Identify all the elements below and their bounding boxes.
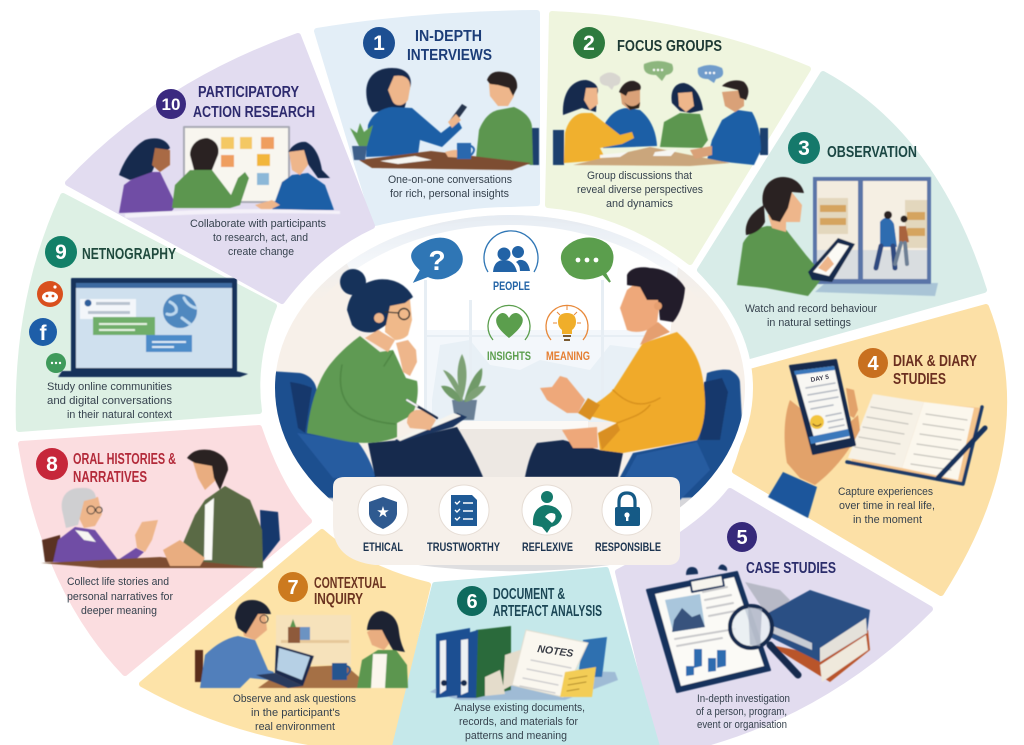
heading: in-depth interviews: IN-DEPTH (415, 28, 482, 45)
badge 4 (858, 348, 888, 378)
panel: 3 observation (700, 74, 984, 357)
heading: diak and diary studies: STUDIES (893, 371, 946, 388)
description: patterns and meaning (465, 730, 567, 742)
badge 2: 2 (583, 32, 595, 55)
label: responsible: RESPONSIBLE (595, 540, 661, 554)
icon: facebook: f (40, 322, 48, 345)
illustration: elder telling a story (41, 450, 280, 568)
panel: 4 diary studies (735, 307, 1004, 593)
description: create change (228, 246, 294, 258)
illustration: team at sticky-note board (119, 127, 340, 218)
badge 8 (36, 448, 68, 480)
description: real environment (255, 721, 335, 733)
description: One-on-one conversations (388, 174, 513, 186)
badge 9: 9 (55, 241, 67, 264)
heading: oral histories and narratives (73, 451, 176, 486)
heading: in-depth interviews (407, 28, 492, 64)
icon: facebook (29, 318, 57, 346)
icon: reflexive figure (522, 485, 572, 535)
label: meaning: MEANING (546, 349, 590, 363)
illustration: researcher with laptop and participant (195, 600, 408, 688)
description: deeper meaning (81, 605, 157, 617)
description (838, 486, 935, 526)
badge 10 (156, 89, 186, 119)
icon: trustworthy checklist (439, 485, 489, 535)
description (47, 381, 173, 421)
badge 7 (278, 572, 308, 602)
icon: reddit (37, 281, 63, 307)
description: for rich, personal insights (390, 188, 510, 200)
description (745, 303, 877, 329)
heading: diak and diary studies: DIAK & DIARY (893, 353, 977, 370)
description (234, 694, 356, 730)
label: insights: INSIGHTS (487, 349, 531, 363)
description: and dynamics (606, 198, 674, 210)
heading: participatory action research: ACTION RESEARCH (193, 104, 315, 121)
badge 1: 1 (373, 32, 385, 55)
panel: 10 participatory action research (68, 36, 372, 301)
heading: case studies: CASE STUDIES (746, 560, 836, 577)
heading: oral histories and narratives: ORAL HISTORIES & (73, 451, 176, 468)
badge 2 (573, 27, 605, 59)
panel: 1 in-depth interviews (317, 13, 539, 223)
illustration: laptop with conversations (58, 279, 248, 377)
description: in the participant's (251, 707, 341, 719)
icon: heart (488, 305, 530, 340)
description (388, 174, 513, 200)
central interview scene (275, 207, 753, 508)
description: Watch and record behaviour (745, 303, 877, 315)
description: In-depth investigation (697, 693, 790, 705)
heading: netnography: NETNOGRAPHY (82, 246, 176, 263)
icon: question bubble: ? (428, 245, 446, 276)
label: trustworthy: TRUSTWORTHY (427, 540, 500, 554)
badge 5: 5 (736, 527, 748, 549)
icon: people (484, 231, 538, 272)
description: reveal diverse perspectives (577, 184, 704, 196)
description: records, and materials for (459, 716, 578, 728)
researcher in chair (270, 269, 483, 500)
icon: responsible padlock (602, 485, 652, 535)
heading: participatory action research: PARTICIPATORY (198, 84, 299, 101)
panel: 5 case studies (618, 491, 930, 745)
icon: light bulb (546, 305, 588, 341)
panel: 2 focus groups (548, 14, 808, 262)
panel: 6 document and artefact analysis (392, 570, 658, 745)
description: of a person, program, (696, 706, 787, 718)
description: Analyse existing documents, (454, 702, 585, 714)
notes page label: NOTES (537, 643, 574, 660)
badge 3: 3 (798, 137, 810, 160)
illustration: interview at a table (350, 68, 539, 170)
badge 8: 8 (46, 453, 58, 476)
description: Capture experiences (838, 486, 934, 498)
description: in natural settings (767, 317, 852, 329)
badge 10: 10 (162, 95, 180, 114)
description: in the moment (853, 514, 922, 526)
heading: focus groups: FOCUS GROUPS (617, 38, 722, 55)
icon: ethical shield (358, 485, 408, 535)
heading: contextual inquiry: CONTEXTUAL (314, 575, 386, 592)
description: personal narratives for (67, 591, 173, 603)
badge 1 (363, 27, 395, 59)
badge 7: 7 (287, 577, 299, 599)
description (696, 693, 790, 731)
description: Collaborate with participants (190, 218, 327, 230)
plant (441, 354, 486, 420)
panel: 7 contextual inquiry (142, 532, 428, 745)
description: Group discussions that (587, 170, 692, 182)
description: to research, act, and (213, 232, 308, 244)
description: in their natural context (67, 409, 172, 421)
badge 5 (727, 522, 757, 552)
badge 9 (45, 236, 77, 268)
heading: document and artefact analysis: DOCUMENT & (493, 586, 565, 603)
illustration: clipboard, magnifier and books (647, 564, 870, 692)
icon: chat bubble (562, 239, 612, 282)
badge 3 (788, 132, 820, 164)
heading: participatory action research (193, 84, 315, 121)
heading: oral histories and narratives: NARRATIVES (73, 469, 147, 486)
label: reflexive: REFLEXIVE (522, 540, 573, 554)
description (190, 218, 327, 258)
heading: contextual inquiry (314, 575, 386, 608)
description (67, 576, 173, 617)
description (454, 702, 585, 742)
icon: question bubble (412, 239, 462, 281)
heading: document and artefact analysis (493, 588, 602, 616)
icon: chat (46, 353, 66, 373)
description: Collect life stories and (67, 576, 169, 588)
icon: ethical shield: ★ (376, 504, 390, 521)
heading: in-depth interviews: INTERVIEWS (407, 47, 492, 64)
description: Study online communities (47, 381, 173, 393)
label: ethical: ETHICAL (363, 540, 403, 554)
shadow beneath card (410, 564, 610, 571)
phone label: DAY 5 (810, 374, 830, 384)
participant in chair (525, 267, 745, 500)
panel: core qualities card (333, 477, 680, 565)
heading: observation: OBSERVATION (827, 144, 917, 161)
badge 4: 4 (867, 353, 879, 375)
description: and digital conversations (47, 395, 173, 407)
heading: diak and diary studies (893, 353, 977, 388)
illustration: binders and notes (430, 626, 618, 700)
heading: contextual inquiry: INQUIRY (314, 591, 363, 608)
badge 6: 6 (466, 591, 478, 613)
heading: document and artefact analysis: ARTEFACT ANALYSIS (493, 603, 602, 620)
panel: 9 netnography (19, 196, 274, 429)
description (577, 170, 704, 210)
description: Observe and ask questions (233, 693, 357, 705)
description: over time in real life, (839, 500, 935, 512)
badge 6 (457, 586, 487, 616)
label: people: PEOPLE (493, 279, 530, 293)
illustration: phone and open diary (768, 360, 985, 518)
panel: 8 oral histories and narratives (21, 428, 309, 673)
description: event or organisation (697, 719, 787, 731)
illustration: group around table (553, 61, 768, 166)
illustration: observer at a shop window (737, 177, 938, 296)
